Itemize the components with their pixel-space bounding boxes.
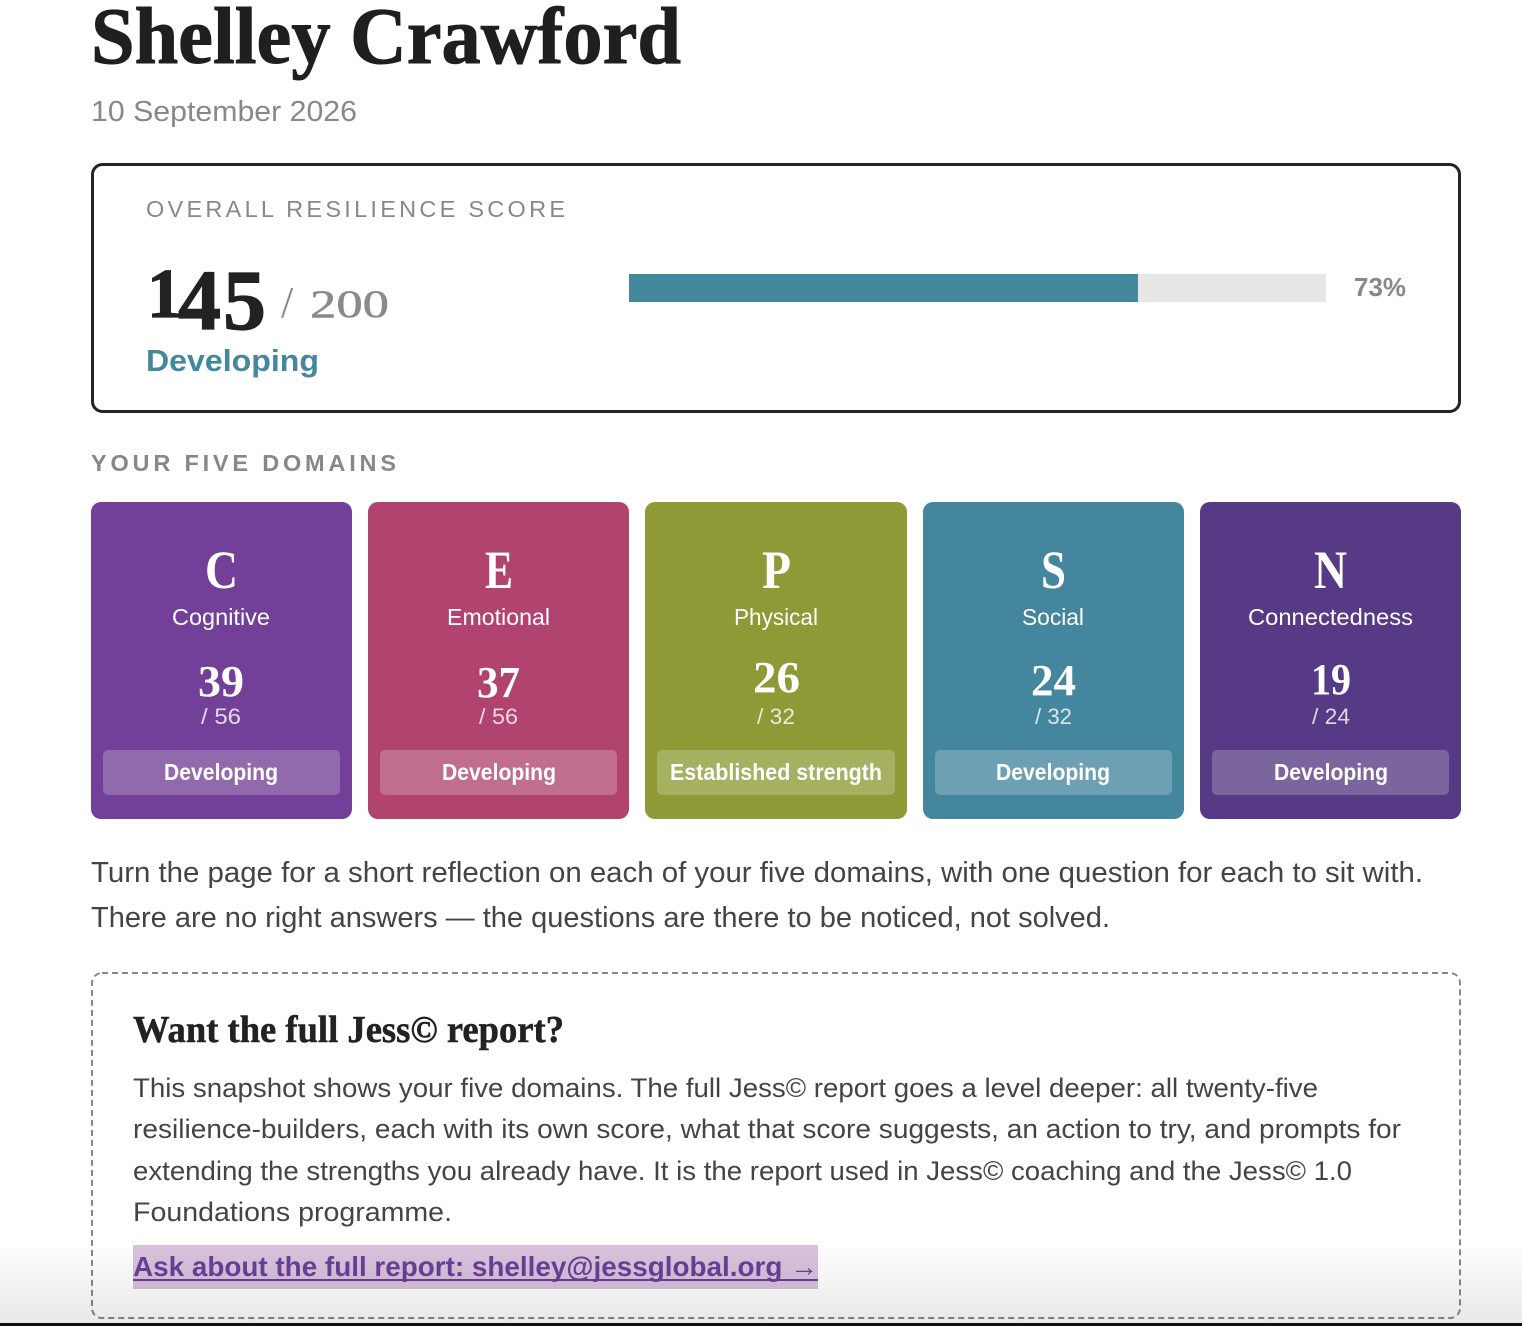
domain letter: C bbox=[205, 540, 238, 600]
level badge: Developing bbox=[164, 759, 278, 785]
domain name: Social bbox=[1022, 604, 1084, 630]
callout heading: Want the full Jess© report? bbox=[133, 1009, 564, 1051]
intro text bbox=[91, 857, 1423, 934]
score maximum: / bbox=[281, 278, 294, 327]
level badge: Developing bbox=[1274, 759, 1388, 785]
domain score: 24 bbox=[1031, 656, 1076, 705]
panel: cognitive domain bbox=[91, 502, 352, 819]
level badge bbox=[657, 750, 895, 795]
level badge bbox=[935, 750, 1172, 795]
domain maximum: / 56 bbox=[201, 704, 241, 729]
domain score: 19 bbox=[1311, 655, 1351, 704]
intro text: There are no right answers — the questions are there to be noticed, not solved. bbox=[91, 902, 1110, 934]
level badge bbox=[103, 750, 340, 795]
panel: overall resilience score bbox=[92, 164, 1460, 412]
panel: social domain bbox=[923, 502, 1184, 819]
panel: full report callout bbox=[92, 973, 1460, 1318]
level badge bbox=[380, 750, 617, 795]
section heading: YOUR FIVE DOMAINS bbox=[91, 450, 396, 476]
score maximum value: 200 bbox=[310, 283, 389, 326]
score value: 5 bbox=[223, 252, 266, 348]
level badge: Developing bbox=[442, 759, 556, 785]
callout body: This snapshot shows your five domains. The full Jess© report goes a level deeper: all twenty-five bbox=[133, 1073, 1318, 1103]
domain letter: N bbox=[1314, 540, 1347, 600]
callout body bbox=[133, 1073, 1401, 1227]
level badge bbox=[1212, 750, 1449, 795]
score value: 1 bbox=[147, 256, 182, 333]
callout body: Foundations programme. bbox=[133, 1197, 452, 1227]
domain letter: P bbox=[762, 540, 791, 600]
callout body: resilience-builders, each with its own score, what that score suggests, an action to try, and prompts for bbox=[133, 1114, 1401, 1144]
domain name: Connectedness bbox=[1248, 604, 1413, 630]
panel: connectedness domain bbox=[1200, 502, 1461, 819]
domain maximum: / 32 bbox=[757, 704, 795, 729]
level badge: Established strength bbox=[670, 759, 882, 785]
callout body: extending the strengths you already have. It is the report used in Jess© coaching and the Jess© 1.0 bbox=[133, 1156, 1352, 1186]
domain letter: E bbox=[485, 540, 513, 600]
domain score: 37 bbox=[477, 658, 520, 707]
domain maximum: / 56 bbox=[479, 704, 518, 729]
domain letter: S bbox=[1041, 540, 1066, 600]
date: 10 September 2026 bbox=[91, 96, 357, 128]
score value: 4 bbox=[178, 252, 221, 348]
score level: Developing bbox=[146, 343, 319, 378]
panel: emotional domain bbox=[368, 502, 629, 819]
domain name: Physical bbox=[734, 604, 818, 630]
progress percentage: 73% bbox=[1354, 272, 1406, 302]
level badge: Developing bbox=[996, 759, 1110, 785]
domain name: Cognitive bbox=[172, 604, 270, 630]
intro text: Turn the page for a short reflection on each of your five domains, with one question for each to sit with. bbox=[91, 857, 1423, 889]
domain maximum: / 32 bbox=[1035, 704, 1072, 729]
domain name: Emotional bbox=[447, 604, 550, 630]
progress bar bbox=[629, 274, 1326, 302]
panel: physical domain bbox=[645, 502, 907, 819]
callout link: Ask about the full report: shelley@jessglobal.org → bbox=[133, 1251, 818, 1282]
domain maximum: / 24 bbox=[1312, 704, 1350, 729]
domain score: 39 bbox=[198, 657, 244, 706]
score label: OVERALL RESILIENCE SCORE bbox=[146, 196, 565, 222]
domain score: 26 bbox=[753, 653, 800, 702]
